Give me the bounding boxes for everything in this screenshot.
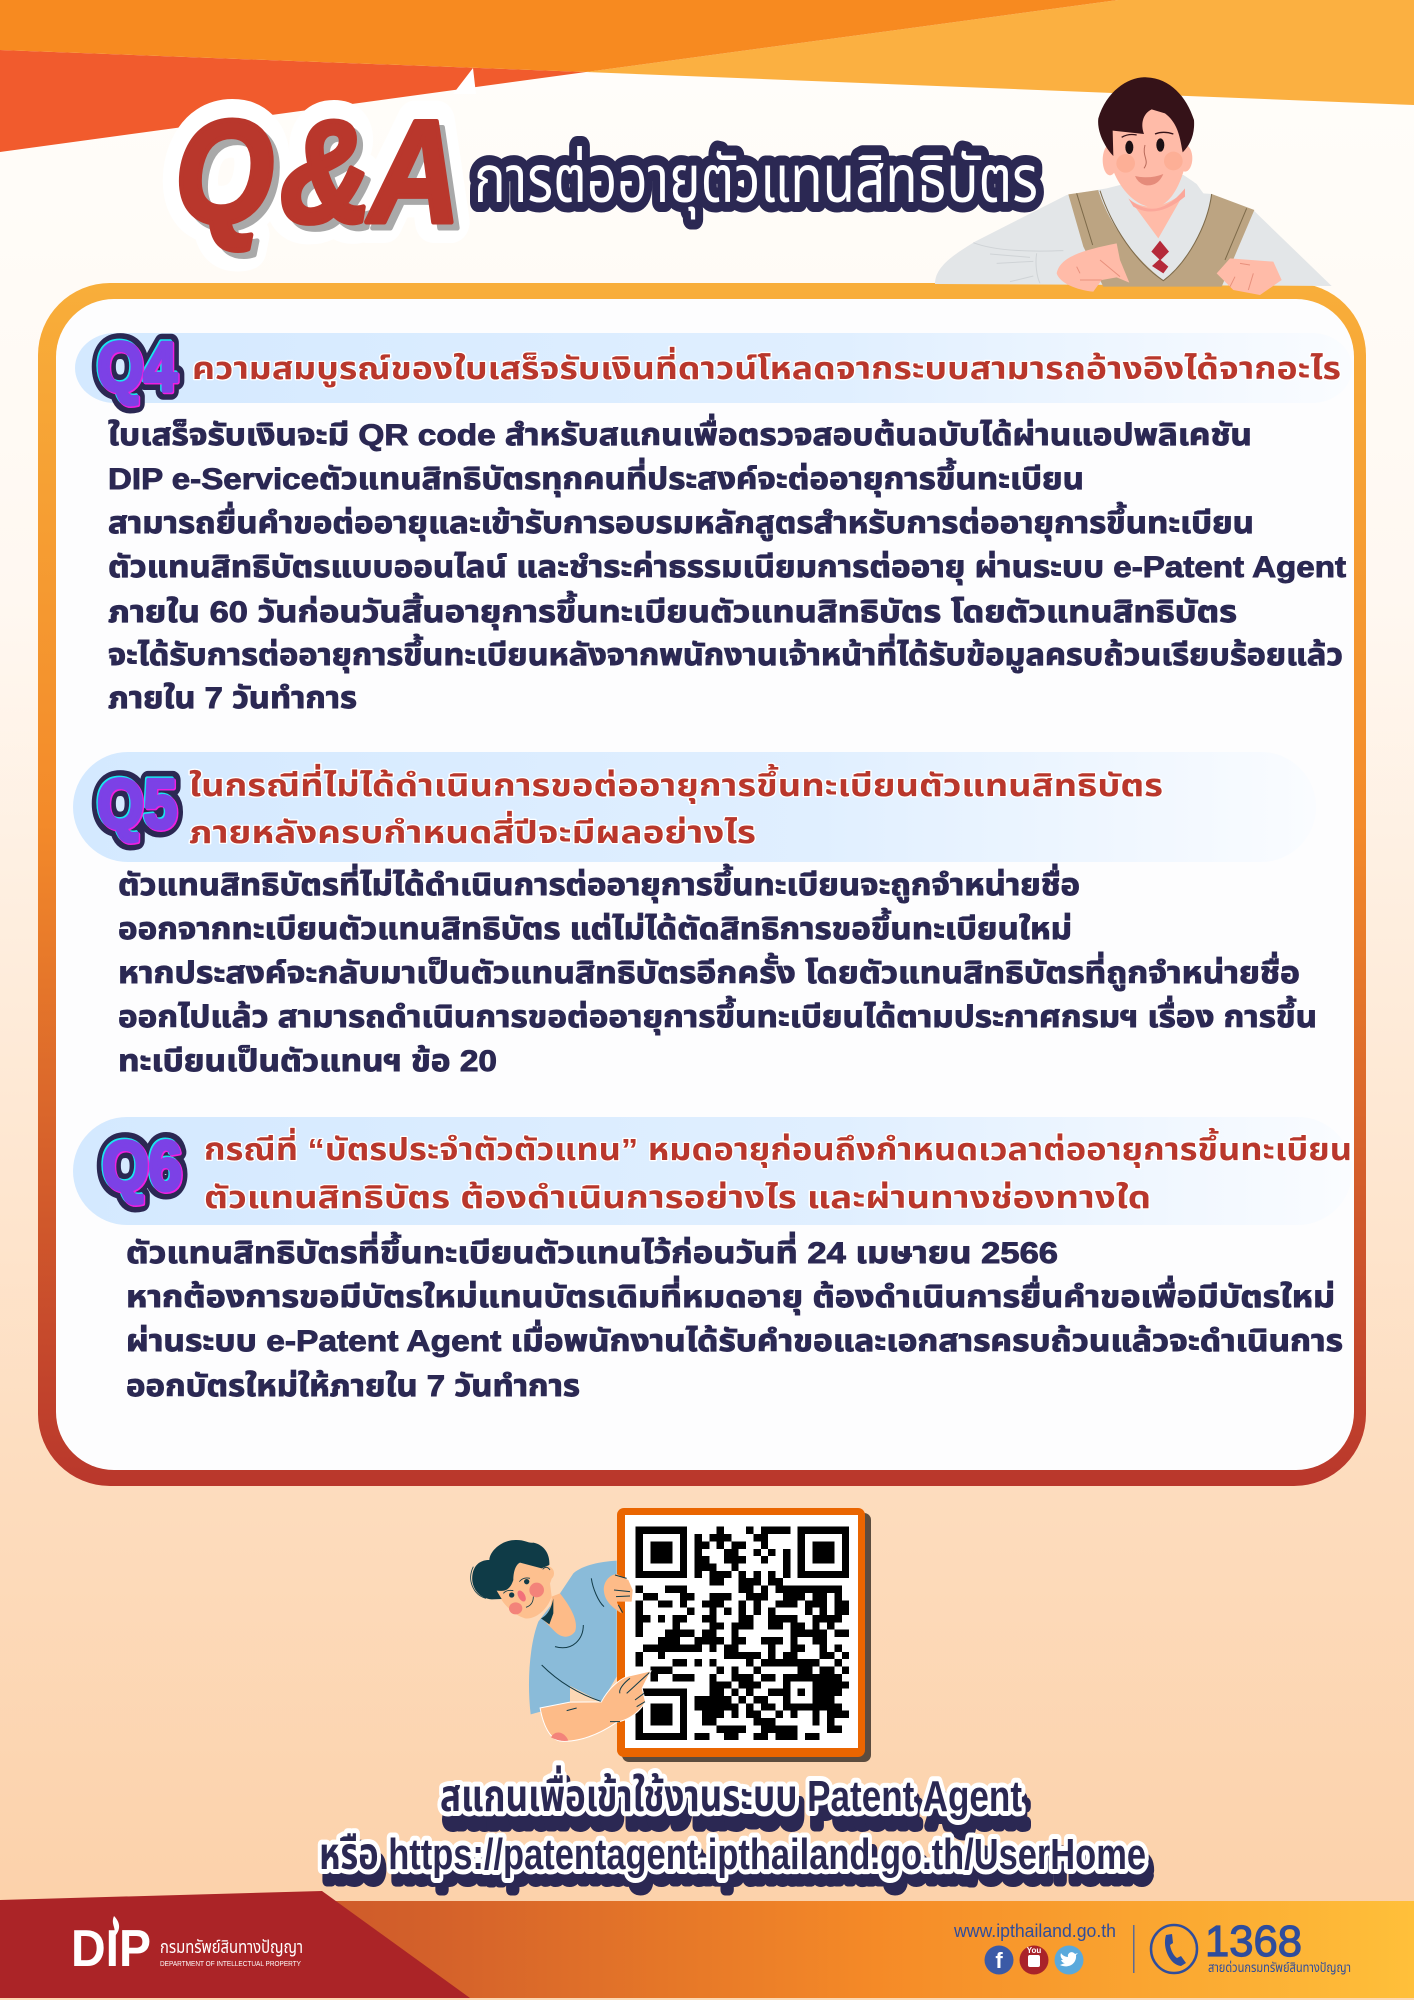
Q4 question: ความสมบูรณ์ของใบเสร็จรับเงินที่ดาวน์โหลดจากระบบสามารถอ้างอิงได้จากอะไร — [192, 346, 1341, 387]
Q4 badge: Q4 — [97, 328, 177, 406]
Q5 heading bar — [73, 752, 1316, 862]
panel: Q4 — [75, 327, 1352, 715]
hotline 1368: 1368 — [1205, 1917, 1302, 1966]
divider — [1133, 1925, 1134, 1973]
icon: twitter — [1054, 1946, 1084, 1974]
Q5 answer — [118, 863, 1317, 1078]
DIP logo: DIP — [71, 1920, 151, 1978]
icon: phone — [1151, 1925, 1197, 1973]
Q6 badge: Q6 — [103, 1128, 183, 1206]
Q6 question: กรณีที่ “บัตรประจำตัวตัวแทน” หมดอายุก่อนถึงกำหนดเวลาต่ออายุการขึ้นทะเบียน — [204, 1127, 1352, 1168]
Q5 badge: Q5 — [96, 764, 176, 842]
Q4 badge: Q4 — [96, 327, 176, 405]
main panel inner card — [56, 299, 1354, 1470]
DIP logo: กรมทรัพย์สินทางปัญญา — [160, 1937, 303, 1957]
illustration: hands over panel edge — [1057, 243, 1282, 295]
call to action text: สแกนเพื่อเข้าใช้งานระบบ Patent Agent — [445, 1780, 1027, 1836]
Q6 badge: Q6 — [102, 1127, 182, 1205]
title: Q&A: Q&A — [175, 90, 461, 253]
icon: youtube: You — [1027, 1946, 1041, 1955]
title: Q&A: Q&A — [175, 90, 461, 253]
call to action text: หรือ https://patentagent.ipthailand.go.th/UserHome — [324, 1842, 1151, 1891]
Q5 answer: หากประสงค์จะกลับมาเป็นตัวแทนสิทธิบัตรอีกครั้ง โดยตัวแทนสิทธิบัตรที่ถูกจำหน่ายชื่อ — [118, 951, 1300, 991]
Q4 answer: DIP e-Serviceตัวแทนสิทธิบัตรทุกคนที่ประสงค์จะต่ออายุการขึ้นทะเบียน — [108, 457, 1084, 497]
title: Thai heading: การต่ออายุตัวแทนสิทธิบัตร — [474, 142, 1038, 219]
Q6 answer: ออกบัตรใหม่ให้ภายใน 7 วันทำการ — [126, 1370, 580, 1403]
website and social icons: www.ipthailand.go.th — [953, 1921, 1116, 1941]
Q5 badge: Q5 — [98, 766, 178, 844]
Q4 answer: ใบเสร็จรับเงินจะมี QR code สำหรับสแกนเพื่อตรวจสอบต้นฉบับได้ผ่านแอปพลิเคชัน — [108, 413, 1252, 452]
Q6 answer — [126, 1231, 1343, 1403]
Q4 answer: สามารถยื่นคำขอต่ออายุและเข้ารับการอบรมหลักสูตรสำหรับการต่ออายุการขึ้นทะเบียน — [108, 501, 1254, 541]
icon: facebook: f — [995, 1948, 1003, 1973]
footer band — [0, 1891, 1414, 2000]
hotline 1368: สายด่วนกรมทรัพย์สินทางปัญญา — [1208, 1960, 1351, 1975]
DIP logo — [71, 1916, 303, 1978]
Q6 question — [204, 1127, 1352, 1215]
Q5 question: ภายหลังครบกำหนดสี่ปีจะมีผลอย่างไร — [189, 810, 756, 850]
Q6 answer: หากต้องการขอมีบัตรใหม่แทนบัตรเดิมที่หมดอายุ ต้องดำเนินการยื่นคำขอเพื่อมีบัตรใหม่ — [126, 1275, 1335, 1315]
Q5 answer: ทะเบียนเป็นตัวแทนฯ ข้อ 20 — [118, 1045, 497, 1078]
Q5 answer: ตัวแทนสิทธิบัตรที่ไม่ได้ดำเนินการต่ออายุการขึ้นทะเบียนจะถูกจำหน่ายชื่อ — [118, 863, 1080, 903]
panel: Q5 — [73, 752, 1317, 1078]
Q4 answer: ภายใน 60 วันก่อนวันสิ้นอายุการขึ้นทะเบียนตัวแทนสิทธิบัตร โดยตัวแทนสิทธิบัตร — [108, 590, 1237, 630]
Q6 heading bar — [73, 1117, 1352, 1225]
hotline 1368 — [1151, 1917, 1351, 1975]
Q5 answer: ออกไปแล้ว สามารถดำเนินการขอต่ออายุการขึ้นทะเบียนได้ตามประกาศกรมฯ เรื่อง การขึ้น — [118, 995, 1317, 1035]
website and social icons — [953, 1921, 1116, 1974]
Q4 answer — [108, 413, 1346, 715]
Q5 badge: Q5 — [97, 765, 177, 843]
Q4 answer: จะได้รับการต่ออายุการขึ้นทะเบียนหลังจากพนักงานเจ้าหน้าที่ได้รับข้อมูลครบถ้วนเรียบร้อยแล้ว — [108, 633, 1343, 673]
call to action text: สแกนเพื่อเข้าใช้งานระบบ Patent Agent — [440, 1765, 1022, 1821]
QR code card — [617, 1508, 871, 1762]
Q6 answer: ผ่านระบบ e-Patent Agent เมื่อพนักงานได้รับคำขอและเอกสารครบถ้วนแล้วจะดำเนินการ — [126, 1319, 1343, 1358]
QR modules — [636, 1527, 849, 1740]
title: Q&A: Q&A — [181, 96, 467, 259]
icon: youtube — [1020, 1946, 1048, 1974]
illustration: man in vest — [935, 77, 1332, 287]
icon: facebook — [984, 1946, 1014, 1974]
Q6 answer: ตัวแทนสิทธิบัตรที่ขึ้นทะเบียนตัวแทนไว้ก่อนวันที่ 24 เมษายน 2566 — [126, 1231, 1058, 1270]
call to action text: หรือ https://patentagent.ipthailand.go.th/UserHome — [319, 1830, 1146, 1879]
Q6 question: ตัวแทนสิทธิบัตร ต้องดำเนินการอย่างไร และผ่านทางช่องทางใด — [204, 1180, 1151, 1215]
Q4 answer: ตัวแทนสิทธิบัตรแบบออนไลน์ และชำระค่าธรรมเนียมการต่ออายุ ผ่านระบบ e-Patent Agent — [108, 551, 1346, 585]
call to action text — [319, 1765, 1151, 1891]
main panel frame — [38, 283, 1366, 1486]
Q4 badge: Q4 — [97, 328, 177, 406]
DIP logo: DEPARTMENT OF INTELLECTUAL PROPERTY — [160, 1961, 301, 1968]
Q5 question: ในกรณีที่ไม่ได้ดำเนินการขอต่ออายุการขึ้นทะเบียนตัวแทนสิทธิบัตร — [189, 763, 1163, 804]
Q6 badge: Q6 — [102, 1127, 182, 1205]
illustration: boy pointing at QR code — [471, 1540, 650, 1741]
Q5 answer: ออกจากทะเบียนตัวแทนสิทธิบัตร แต่ไม่ได้ตัดสิทธิการขอขึ้นทะเบียนใหม่ — [118, 907, 1072, 946]
Q5 badge: Q5 — [97, 765, 177, 843]
Q4 answer: ภายใน 7 วันทำการ — [108, 682, 357, 715]
Q4 heading bar — [75, 333, 1352, 403]
Q6 badge: Q6 — [101, 1126, 181, 1204]
panel: Q6 — [73, 1117, 1352, 1403]
header banner shapes — [0, 0, 1414, 152]
Q5 question — [189, 763, 1163, 850]
Q4 badge: Q4 — [98, 329, 178, 407]
